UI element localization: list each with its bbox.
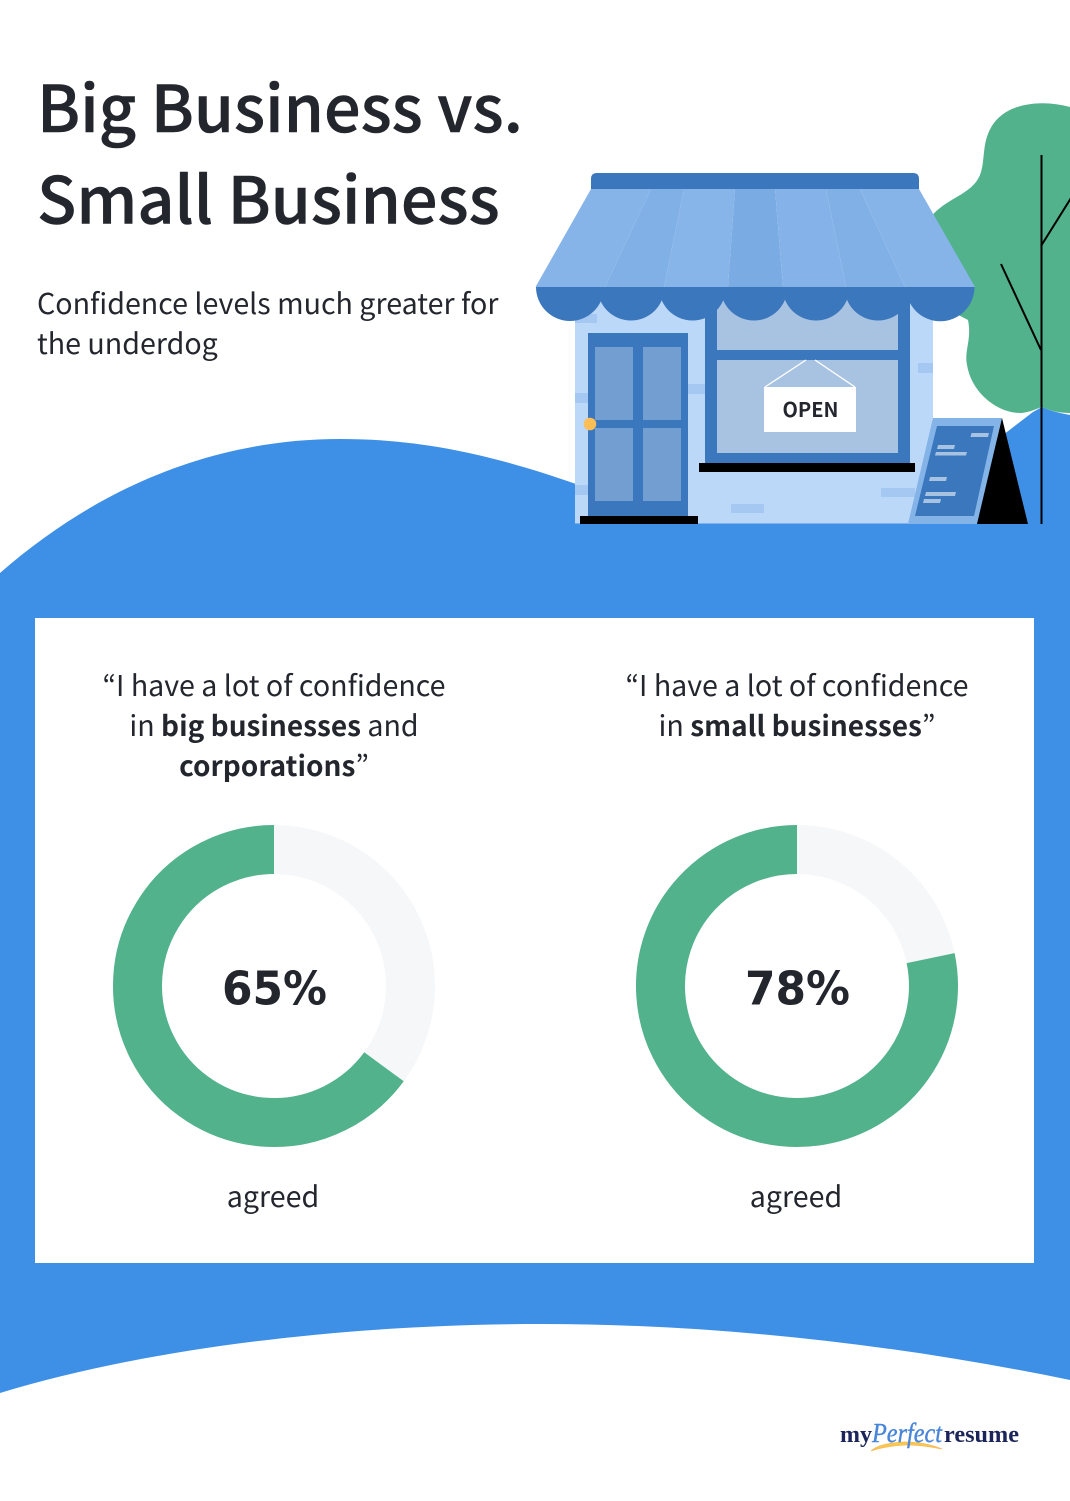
right caption: agreed <box>750 1175 842 1216</box>
left column: big business question: corporations” <box>179 744 369 785</box>
logo: myPerfectResume <box>840 1418 1019 1451</box>
title: Small Business <box>37 148 500 242</box>
door knob <box>584 418 596 430</box>
window sill <box>699 463 915 472</box>
illustration: tree trunk and branches <box>1001 155 1070 524</box>
shop window <box>705 300 910 463</box>
right column: small business question: “I have a lot of confidence <box>625 664 969 705</box>
subtitle <box>37 282 499 363</box>
logo: myPerfectResume: my <box>840 1422 872 1448</box>
door <box>588 333 688 516</box>
subtitle: Confidence levels much greater for <box>37 282 499 323</box>
logo: myPerfectResume: resume <box>944 1422 1019 1448</box>
illustration: storefront <box>536 173 1028 524</box>
door step <box>580 516 698 524</box>
left column: big business question: “I have a lot of confidence <box>102 664 446 705</box>
donut chart: 65% <box>137 850 410 1122</box>
panel: white survey card <box>35 618 1034 1263</box>
donut chart: 78% <box>660 850 934 1122</box>
left caption: agreed <box>227 1175 319 1216</box>
left column: big business question: in big businesses and <box>129 704 419 745</box>
left column: big business question <box>102 664 446 785</box>
right column: small business question: in small businesses” <box>659 704 935 745</box>
shop wall <box>575 300 933 524</box>
title <box>37 57 523 242</box>
illustration: tree foliage <box>930 103 1070 413</box>
donut chart: 65%: 65% <box>222 962 327 1016</box>
subtitle: the underdog <box>37 322 218 363</box>
open sign <box>764 360 856 432</box>
right column: small business question <box>625 664 969 745</box>
sidewalk board sign <box>908 418 1028 524</box>
logo: myPerfectResume: Perfect <box>871 1418 943 1448</box>
wall bricks <box>575 314 933 513</box>
title: Big Business vs. <box>37 57 523 151</box>
open sign: OPEN <box>782 394 839 423</box>
donut chart: 78%: 78% <box>745 962 850 1016</box>
awning <box>536 173 975 321</box>
background: blue wave band <box>0 407 1070 1393</box>
